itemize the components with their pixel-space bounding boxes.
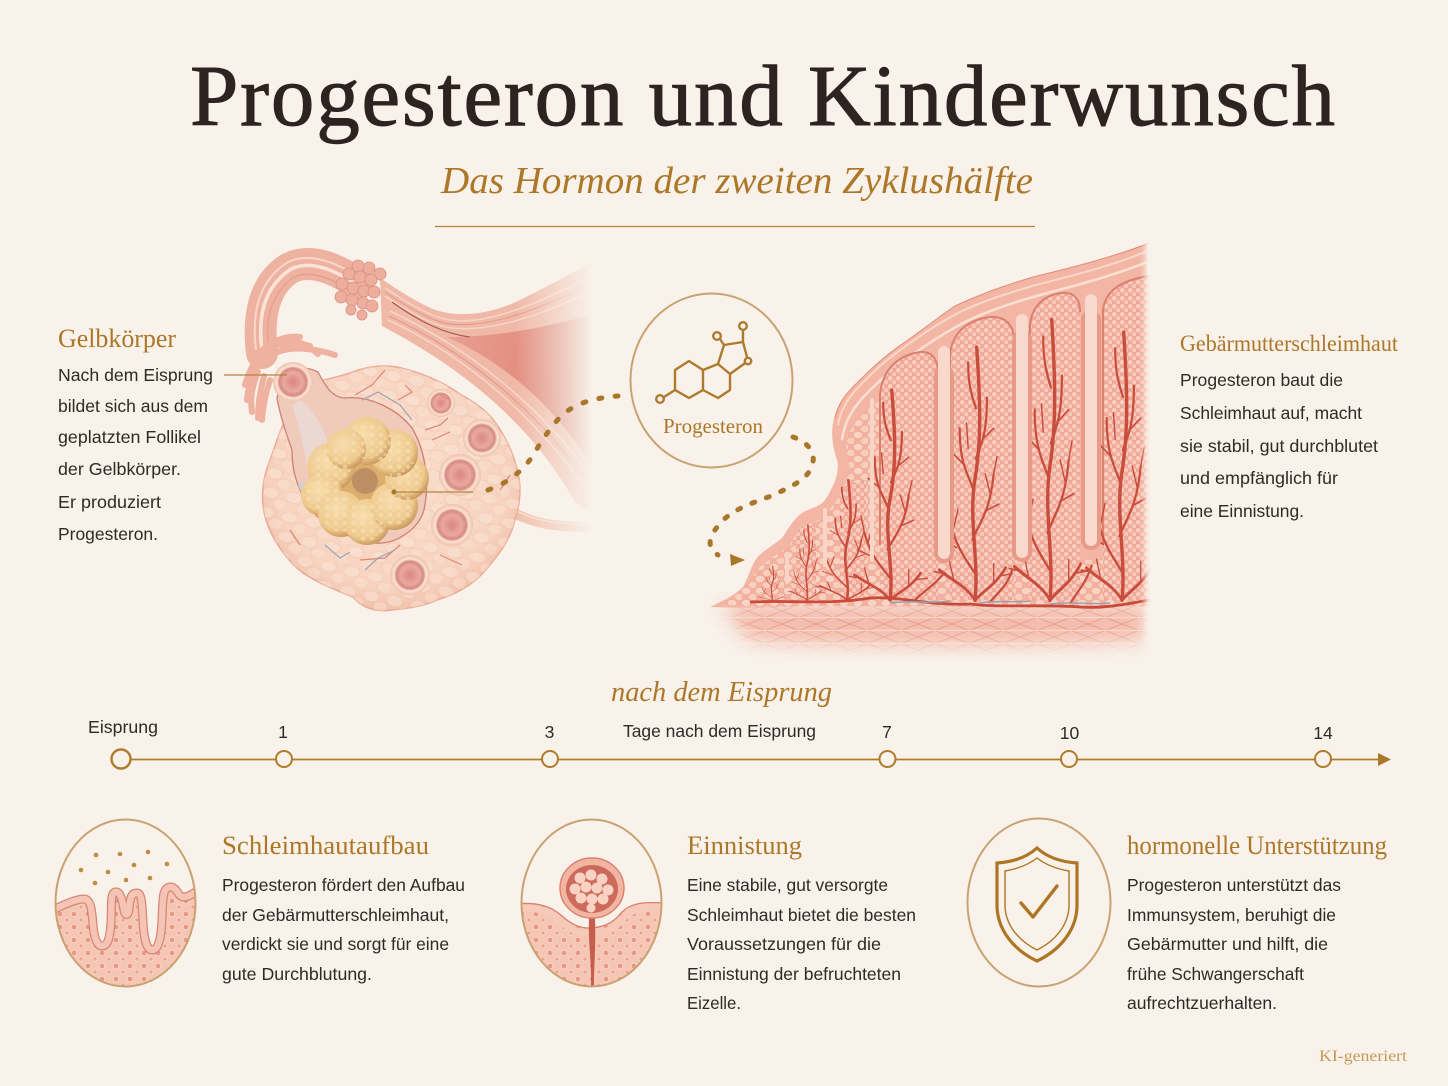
text block: hormonelle Unterstützung (1127, 831, 1387, 1013)
text block: Einnistung: Eizelle. (687, 993, 741, 1013)
bubbly stroma (722, 395, 1150, 607)
corpus luteum (301, 417, 429, 545)
text block: Gebärmutterschleimhaut: und empfänglich für (1180, 468, 1338, 488)
basal vessels (750, 598, 1150, 607)
text block: Gelbkörper: Nach dem Eisprung (58, 365, 213, 385)
pointer: corpus luteum (395, 491, 473, 493)
progesterone molecule badge (630, 294, 792, 468)
icon: shield with check (968, 818, 1110, 986)
text block: hormonelle Unterstützung: hormonelle Unterstützung (1127, 831, 1387, 860)
text block: Gebärmutterschleimhaut: sie stabil, gut durchblutet (1180, 436, 1378, 456)
text block: Gelbkörper: Er produziert (58, 492, 161, 512)
timeline: 3 (545, 722, 554, 742)
text block: Einnistung: Einnistung der befruchteten (687, 964, 901, 984)
text block: Einnistung: Schleimhaut bietet die besten (687, 905, 916, 925)
pointer: follicle (224, 374, 287, 376)
timeline: 1 (278, 722, 288, 742)
text block: Einnistung: Voraussetzungen für die (687, 934, 881, 954)
timeline: Eisprung (88, 717, 158, 737)
text block: Einnistung: Einnistung (687, 831, 802, 860)
timeline: 10 (1060, 723, 1079, 743)
ovary blood vessels (290, 370, 510, 565)
text block: Schleimhautaufbau (222, 831, 465, 984)
subtitle: Das Hormon der zweiten Zyklushälfte (440, 160, 1033, 202)
illustration: endometrium (690, 243, 1160, 670)
text block: hormonelle Unterstützung: Gebärmutter und hilft, die (1127, 934, 1328, 954)
text block: Gebärmutterschleimhaut: eine Einnistung. (1180, 501, 1304, 521)
text block: Gelbkörper: bildet sich aus dem (58, 396, 208, 416)
text block: hormonelle Unterstützung: Immunsystem, beruhigt die (1127, 905, 1336, 925)
text block: Gebärmutterschleimhaut: Gebärmutterschleimhaut (1180, 331, 1399, 356)
pale slits between glands (944, 320, 1091, 553)
text block: Schleimhautaufbau: verdickt sie und sorgt für eine (222, 934, 449, 954)
timeline heading: nach dem Eisprung (611, 676, 832, 708)
text block: Schleimhautaufbau: Progesteron fördert den Aufbau (222, 875, 465, 895)
progesterone molecule badge: Progesteron (663, 414, 763, 438)
blood vessel trees (849, 390, 927, 600)
ovary cut-away cavity (277, 368, 427, 543)
tube knot (335, 260, 386, 320)
title: Progesteron und Kinderwunsch (190, 47, 1335, 144)
surface layers (838, 250, 1150, 425)
text block: Schleimhautaufbau: Schleimhautaufbau (222, 831, 429, 860)
text block: Gebärmutterschleimhaut (1180, 331, 1399, 521)
text block: hormonelle Unterstützung: frühe Schwangerschaft (1127, 964, 1304, 984)
icon: endometrium build-up (54, 818, 196, 988)
text block: Gebärmutterschleimhaut: Schleimhaut auf, macht (1180, 403, 1362, 423)
fimbriae (245, 337, 335, 420)
endometrium body (710, 243, 1150, 608)
footer note: KI-generiert (1319, 1048, 1408, 1065)
timeline: 7 (882, 722, 892, 742)
text block: hormonelle Unterstützung: Progesteron unterstützt das (1127, 875, 1341, 895)
text block: hormonelle Unterstützung: aufrechtzuerhalten. (1127, 993, 1277, 1013)
text block: Gelbkörper: Gelbkörper (58, 324, 176, 353)
text block: Gebärmutterschleimhaut: Progesteron baut die (1180, 370, 1343, 390)
text block: Schleimhautaufbau: der Gebärmutterschleimhaut, (222, 905, 449, 925)
ruptured follicle (273, 362, 313, 402)
illustration: ovary with corpus luteum (224, 258, 520, 611)
dotted arrow: ovary to progesterone (488, 396, 618, 490)
gland columns (880, 352, 938, 600)
text block: Gelbkörper: Progesteron. (58, 524, 158, 544)
timeline: 14 (1313, 723, 1333, 743)
dotted arrow: progesterone to endometrium (710, 437, 813, 566)
illustration: fallopian tube and ligaments (380, 258, 600, 527)
text block: Einnistung: Eine stabile, gut versorgte (687, 875, 888, 895)
text block: Gelbkörper (58, 324, 213, 544)
text block: Schleimhautaufbau: gute Durchblutung. (222, 964, 372, 984)
timeline: Tage nach dem Eisprung (623, 721, 816, 741)
text block: Gelbkörper: der Gelbkörper. (58, 459, 181, 479)
icon: implantation (515, 820, 670, 990)
molecule icon (656, 322, 751, 403)
timeline (88, 717, 1391, 768)
muscle base layer (717, 600, 1148, 656)
follicles (390, 389, 501, 595)
text block: Einnistung (687, 831, 916, 1013)
text block: Gelbkörper: geplatzten Follikel (58, 427, 201, 447)
